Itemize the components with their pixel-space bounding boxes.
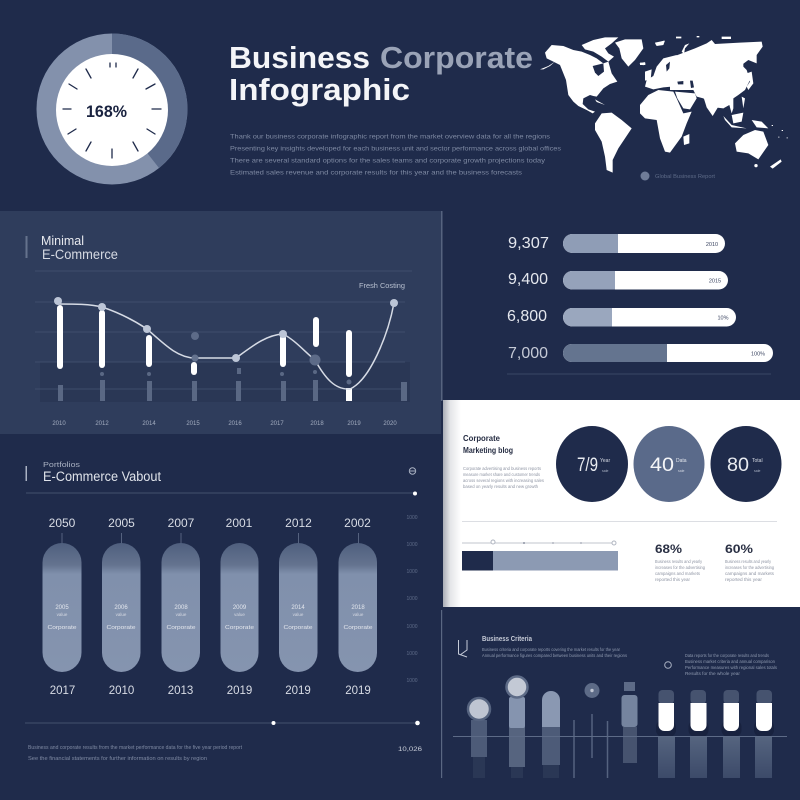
description right: Results for the whole year [685, 671, 741, 676]
pill 1: 2005 [55, 605, 69, 611]
thin lines [574, 714, 608, 778]
pill 3: 2008 [174, 605, 188, 611]
title [229, 40, 533, 107]
description left: Business criteria and corporate reports covering the market results for the year [482, 647, 620, 652]
pill 6: Corporate [344, 625, 372, 631]
intro text block: Estimated sales revenue and corporate results for this year and the business forecasts [230, 170, 522, 176]
world map [540, 36, 788, 173]
intro text block [230, 134, 561, 176]
title: Corporate [380, 40, 533, 75]
white panel text: based on yearly results and new growth [463, 484, 538, 489]
pill 4 [220, 543, 258, 672]
stat text 60%: 60% [725, 544, 753, 556]
stat text 68%: campaigns and markets [655, 571, 701, 576]
bar row 2: 2015 [709, 278, 721, 284]
stat text 68%: increases for the advertising [655, 565, 705, 570]
bottom year labels [50, 685, 371, 697]
small dot marker [584, 683, 600, 698]
chart axis labels: 2020 [383, 421, 397, 427]
stat circle 3: 80 [727, 455, 749, 476]
progress bar [462, 540, 618, 570]
pill 6: value [353, 612, 364, 617]
timeline heading: E-Commerce Vabout [43, 469, 161, 484]
stat circle 2: 40 [650, 455, 674, 476]
timeline footnote: See the financial statements for further information on results by region [28, 756, 207, 762]
stat circle 3: Total [752, 458, 763, 464]
stat text 68%: 68% [655, 544, 682, 556]
bar row 4: 100% [751, 352, 765, 358]
chart axis labels: 2015 [186, 421, 200, 427]
description right: Performance measures with regional sales totals [685, 665, 778, 670]
intro text block: There are several standard options for the sales teams and corporate growth projections today [230, 158, 545, 164]
stat text 60%: campaigns and markets [725, 571, 775, 576]
donut gauge: 168% [86, 102, 127, 121]
description right [685, 653, 778, 676]
description left [482, 647, 628, 658]
pill 2: Corporate [106, 625, 136, 631]
top year labels: 2012 [285, 516, 312, 530]
reflected columns [471, 720, 772, 778]
column 4 [622, 682, 638, 727]
donut gauge [36, 34, 188, 184]
icon: small ring [665, 662, 671, 668]
pill 5 [279, 543, 318, 672]
bottom year labels: 2010 [109, 685, 134, 697]
side scale labels: 1000 [406, 678, 418, 684]
bar row 1: 9,307 [508, 235, 549, 252]
stat text 60%: Business results and yearly [725, 559, 772, 564]
intro text block: Thank our business corporate infographic report from the market overview data for all the regions [230, 134, 550, 140]
stat circle 1: Year [600, 458, 610, 464]
pill 4: value [234, 612, 245, 617]
side scale labels: 1000 [406, 542, 418, 548]
description left: Annual performance figures compared between business units and their regions [482, 653, 628, 658]
pill 5: Corporate [284, 625, 312, 631]
stat circle 1: 7/9 [577, 455, 598, 476]
bottom year labels: 2017 [50, 685, 75, 697]
side scale labels: 1000 [406, 596, 418, 602]
chart axis labels: 2010 [52, 421, 66, 427]
icon: globe [409, 468, 416, 474]
top year labels: 2001 [226, 516, 253, 530]
chart [35, 271, 412, 402]
bar row 3: 10% [717, 316, 729, 322]
bottom year labels: 2013 [168, 685, 193, 697]
timeline footnote [28, 745, 242, 762]
icon: chevron glyph [458, 640, 467, 657]
white panel text: across several regions with increasing sales [463, 478, 545, 483]
chart axis labels: 2014 [142, 421, 156, 427]
timeline slider [25, 721, 420, 725]
stat text 68%: reported this year [655, 577, 690, 582]
stat circle 3 [710, 426, 782, 502]
chart axis labels [52, 421, 397, 427]
panel: pill timeline [25, 462, 422, 762]
stat text 60% [725, 544, 775, 582]
description right: Business market criteria and annual comparison [685, 659, 775, 664]
pill 2 [102, 543, 140, 672]
white panel text: measure market share and customer trends [463, 472, 541, 477]
bottom year labels: 2019 [285, 685, 311, 697]
top year labels [49, 516, 371, 530]
pill 5: 2014 [291, 605, 305, 611]
pill 3 [162, 543, 200, 672]
stat text 60%: increases for the advertising [725, 565, 774, 570]
white panel heading: Corporate [463, 433, 500, 443]
circle column 1 [468, 698, 490, 720]
top year labels: 2050 [49, 516, 76, 530]
bar row 1: 2010 [706, 242, 718, 248]
timeline footnote: Business and corporate results from the market performance data for the five year period report [28, 745, 242, 751]
stat text 60%: reported this year [725, 577, 763, 582]
timeline heading: Portfolios [43, 462, 81, 469]
stat circle 1 [556, 426, 628, 502]
description right: Data reports for the corporate results and trends [685, 653, 770, 658]
chart axis labels: 2019 [347, 421, 361, 427]
white panel heading [463, 433, 513, 455]
bar row 1 [508, 234, 725, 253]
pill 2: 2006 [114, 605, 128, 611]
white panel text [463, 466, 545, 489]
pill 5: value [293, 612, 304, 617]
bar row 2: 9,400 [508, 271, 548, 288]
chart annotation: Fresh Costing [359, 281, 405, 290]
bar row 3: 6,800 [507, 308, 547, 325]
top year labels: 2002 [344, 516, 371, 530]
map legend: Global Business Report [655, 174, 715, 180]
panel: header [36, 34, 788, 184]
bar row 3 [507, 308, 736, 326]
top year labels: 2005 [108, 516, 135, 530]
bottom year labels: 2019 [345, 685, 371, 697]
panel: horizontal bars [507, 234, 773, 374]
chart axis labels: 2018 [310, 421, 324, 427]
side scale labels: 1000 [406, 569, 418, 575]
stat circle 3: sale [754, 469, 760, 473]
pill 6 [338, 543, 377, 672]
white columns [656, 690, 774, 737]
pill 3: value [176, 612, 187, 617]
chart heading [26, 234, 118, 262]
chart axis labels: 2017 [270, 421, 284, 427]
rounded column 3 [542, 691, 560, 727]
stat circle 2: Data [676, 458, 687, 464]
chart axis labels: 2016 [228, 421, 242, 427]
chart heading: Minimal [41, 234, 84, 248]
side scale labels: 1000 [406, 515, 418, 521]
side scale labels: 1000 [406, 651, 418, 657]
pill 1 [42, 543, 82, 672]
panel: bottom right chart [441, 610, 787, 778]
chart axis labels: 2012 [95, 421, 109, 427]
pill 4: Corporate [225, 625, 254, 631]
title: Business [229, 40, 370, 75]
bar row 2 [508, 271, 728, 290]
pill 1: value [57, 612, 68, 617]
pill 1: Corporate [48, 625, 76, 631]
intro text block: Presenting key insights developed for each business unit and sector performance across global offices [230, 146, 561, 152]
white panel heading: Marketing blog [463, 446, 513, 455]
white panel text: Corporate advertising and business reports [463, 466, 542, 471]
circle column 2 [506, 676, 528, 728]
stat circle 2 [634, 426, 704, 502]
top year labels: 2007 [168, 516, 195, 530]
bar row 4: 7,000 [508, 345, 548, 362]
pill 4: 2009 [233, 605, 247, 611]
footnote value: 10,026 [398, 746, 422, 753]
side scale labels: 1000 [406, 624, 418, 630]
stat text 68% [655, 544, 705, 582]
timeline heading [26, 462, 161, 484]
stat text 68%: Business results and yearly [655, 559, 703, 564]
stat circle 1: sale [602, 469, 608, 473]
pill 6: 2018 [351, 605, 365, 611]
bottom year labels: 2019 [227, 685, 252, 697]
side scale labels [406, 515, 418, 684]
map legend [640, 172, 715, 180]
pill 2: value [116, 612, 127, 617]
pill 3: Corporate [166, 625, 196, 631]
bar row 4 [508, 344, 773, 362]
panel heading: Business Criteria [482, 636, 532, 643]
panel: line chart [0, 211, 442, 434]
chart heading: E-Commerce [42, 246, 118, 262]
title: Infographic [229, 72, 410, 107]
stat circle 2: sale [678, 469, 684, 473]
panel: white statistics [443, 400, 800, 607]
